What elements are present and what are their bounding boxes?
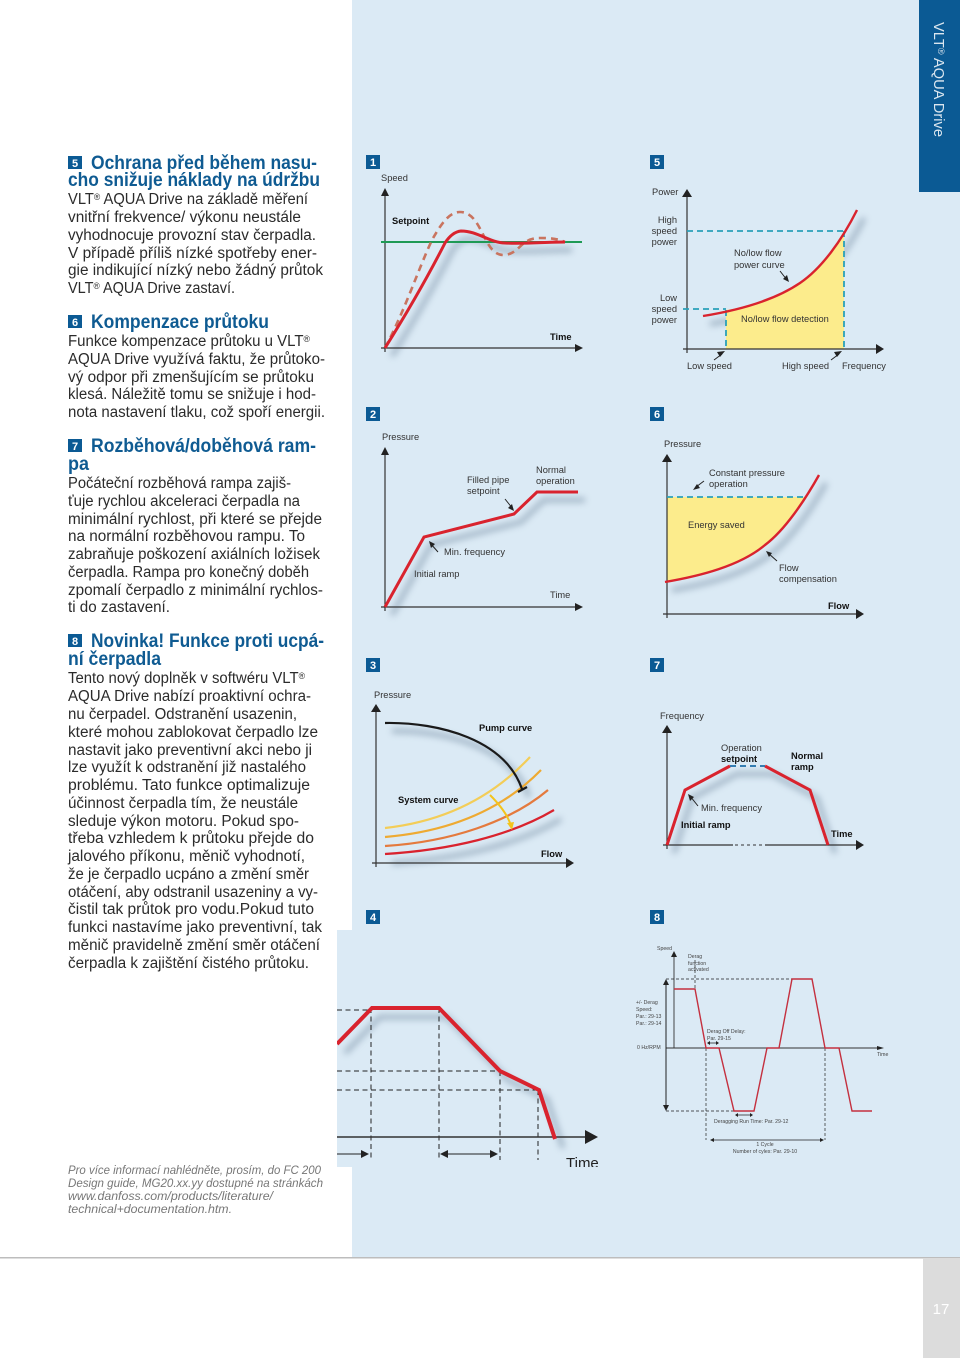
chart 6: pressure over flow: Flow <box>828 601 850 611</box>
chart 8: deragging cycle: 0 Hz/RPM <box>637 1045 661 1051</box>
chart 3: pump and system curves: 3 <box>370 660 376 672</box>
chart 7: frequency ramp: 7 <box>654 660 660 672</box>
chart 2: pressure with ramp: Initial ramp <box>414 569 459 579</box>
chart 7: frequency ramp: Operation <box>721 743 762 753</box>
chart 7: frequency ramp: Frequency <box>660 711 704 721</box>
chart 2: pressure with ramp: Pressure <box>382 432 419 442</box>
text section 8: new deragging function: nastavit jako preventivní akci nebo ji <box>68 742 312 759</box>
chart 5: power over frequency: No/low flow detection <box>741 314 829 324</box>
chart 6: pressure over flow: Flow <box>779 563 799 573</box>
footer rule <box>0 1257 960 1258</box>
text section 8: new deragging function: problému. Tato funkce optimalizuje <box>68 777 310 794</box>
text section 5: protection against dry running: VLT <box>68 280 95 297</box>
text section 8: new deragging function: ní čerpadla <box>68 649 161 670</box>
text section 8: new deragging function: čistil tak průtok pro vodu.Pokud tuto <box>68 901 314 918</box>
chart 8: deragging cycle: 1 Cycle <box>756 1142 774 1148</box>
page number <box>923 1258 960 1358</box>
chart 5: power over frequency <box>650 155 886 371</box>
footnote: more information: Pro více informací nahlédněte, prosím, do FC 200 <box>68 1163 321 1177</box>
text section 7: initial and final ramp: minimální rychlost, při které se přejde <box>68 511 322 528</box>
chart 5: power over frequency: High <box>658 215 677 225</box>
chart 8: deragging cycle: Par.: 29-14 <box>636 1021 661 1027</box>
text section 6: flow compensation: vý odpor při zmenšujícím se průtoku <box>68 369 314 386</box>
footnote: more information: Design guide, MG20.xx.yy dostupné na stránkách <box>68 1176 323 1190</box>
text section 8: new deragging function <box>67 631 324 972</box>
text section 5: protection against dry running: ® <box>94 281 100 291</box>
text section 8: new deragging function: měnič pravidelně změní směr otáčení <box>68 937 321 954</box>
chart 1: speed over time: Setpoint <box>392 216 429 226</box>
chart 8: deragging cycle: Time <box>877 1052 888 1058</box>
footnote: more information: www.danfoss.com/products/literature/ <box>68 1189 275 1203</box>
text section 5: protection against dry running: cho snižuje náklady na údržbu <box>68 170 320 191</box>
text section 7: initial and final ramp: 7 <box>72 441 78 453</box>
text section 7: initial and final ramp: Počáteční rozběhová rampa zajiš- <box>68 475 291 492</box>
chart 8: deragging cycle: Number of cyles: Par. 29-10 <box>733 1149 797 1155</box>
chart 7: frequency ramp: ramp <box>791 762 814 772</box>
text section 8: new deragging function: ® <box>299 671 305 681</box>
header tab: product name <box>919 0 960 192</box>
chart 8: deragging cycle: Par. 29-15 <box>707 1036 731 1042</box>
chart 5: power over frequency: Power <box>652 187 678 197</box>
text section 5: protection against dry running: 5 <box>72 158 78 170</box>
header tab: product name: AQUA Drive <box>930 55 946 137</box>
chart 7: frequency ramp: Min. frequency <box>701 803 762 813</box>
chart 8: deragging cycle: Derag <box>688 954 702 960</box>
text section 8: new deragging function: že je čerpadlo ucpáno a změní směr <box>68 866 309 883</box>
text section 7: initial and final ramp: na normální rozběhovou rampu. To <box>68 528 305 545</box>
text section 6: flow compensation: nota nastavení tlaku, což spoří energii. <box>68 404 325 421</box>
footnote: more information: technical+documentation.htm. <box>68 1202 232 1216</box>
text section 8: new deragging function: třeba vzhledem k průtoku přejde do <box>68 830 314 847</box>
chart 2: pressure with ramp: setpoint <box>467 486 500 496</box>
text section 6: flow compensation: AQUA Drive využívá faktu, že průtoko- <box>68 351 325 368</box>
text section 7: initial and final ramp: pa <box>68 454 89 475</box>
chart 2: pressure with ramp: 2 <box>370 409 376 421</box>
chart 5: power over frequency: Low <box>660 293 677 303</box>
chart 8: deragging cycle: activated <box>688 967 709 973</box>
chart 3: pump and system curves: Flow <box>541 849 563 859</box>
text section 8: new deragging function: funkci nastavíme jako preventivní, tak <box>68 919 322 936</box>
chart 7: frequency ramp: Normal <box>791 751 823 761</box>
text section 5: protection against dry running: ® <box>94 192 101 202</box>
chart 7: frequency ramp: Time <box>831 829 853 839</box>
text section 7: initial and final ramp: ti do zastavení. <box>68 599 170 616</box>
text section 6: flow compensation: Funkce kompenzace průtoku u VLT <box>68 333 310 350</box>
text section 8: new deragging function: jalového příkonu, měnič vyhodnotí, <box>67 848 305 865</box>
chart 6: pressure over flow: Energy saved <box>688 520 745 530</box>
chart 2: pressure with ramp: Min. frequency <box>444 547 505 557</box>
chart 6: pressure over flow: Constant pressure <box>709 468 785 478</box>
chart 1: speed over time: 1 <box>370 157 376 169</box>
badge: chart 4 number <box>366 910 380 924</box>
chart 6: pressure over flow <box>650 407 864 619</box>
text section 5: protection against dry running <box>68 153 323 297</box>
text section 5: protection against dry running: vyhodnocuje provozní stav čerpadla. <box>68 227 316 244</box>
text section 7: initial and final ramp: ťuje rychlou akceleraci čerpadla na <box>68 493 300 510</box>
text section 6: flow compensation: klesá. Náležitě tomu se snižuje i hod- <box>68 386 316 403</box>
chart 6: pressure over flow: Pressure <box>664 439 701 449</box>
badge: chart 4 number: 4 <box>370 912 377 924</box>
chart 8: deragging cycle: Derag Off Delay: <box>707 1029 746 1035</box>
chart 2: pressure with ramp: Normal <box>536 465 566 475</box>
text section 5: protection against dry running: Ochrana před během nasu- <box>91 153 317 174</box>
text section 7: initial and final ramp <box>68 436 323 616</box>
chart 2: pressure with ramp <box>366 407 585 615</box>
chart 7: frequency ramp: setpoint <box>721 754 757 764</box>
text section 5: protection against dry running: AQUA Drive na základě měření <box>100 191 309 208</box>
chart 5: power over frequency: High speed <box>782 361 829 371</box>
text section 8: new deragging function: účinnost čerpadla tím, že neustále <box>68 795 298 812</box>
chart 3: pump and system curves: System curve <box>398 795 458 805</box>
text section 8: new deragging function: Novinka! Funkce proti ucpá- <box>91 631 324 652</box>
chart 2: pressure with ramp: Time <box>550 590 570 600</box>
chart 5: power over frequency: Low speed <box>687 361 732 371</box>
chart 8: deragging cycle: 8 <box>654 912 660 924</box>
text section 8: new deragging function: sleduje výkon motoru. Pokud spo- <box>68 813 299 830</box>
chart 3: pump and system curves <box>366 658 574 868</box>
text section 7: initial and final ramp: Rozběhová/doběhová ram- <box>91 436 316 457</box>
chart 7: frequency ramp <box>650 658 864 853</box>
chart 6: pressure over flow: compensation <box>779 574 837 584</box>
chart 5: power over frequency: power <box>652 237 677 247</box>
text section 6: flow compensation <box>68 312 325 421</box>
text section 6: flow compensation: 6 <box>72 317 78 329</box>
text section 8: new deragging function: 8 <box>72 636 78 648</box>
chart 5: power over frequency: speed <box>652 304 677 314</box>
text section 8: new deragging function: Tento nový doplněk v softwéru VLT <box>68 670 306 687</box>
chart 8: deragging cycle: function <box>688 961 706 967</box>
chart 8: deragging cycle <box>636 910 888 1155</box>
chart 3: pump and system curves: Pressure <box>374 690 411 700</box>
text section 8: new deragging function: čerpadla k zajištění čistého průtoku. <box>68 955 309 972</box>
text section 7: initial and final ramp: zabraňuje poškození axiálních ložisek <box>68 546 320 563</box>
chart 5: power over frequency: power <box>652 315 677 325</box>
chart 4: ramp profile, cropped <box>337 1008 599 1172</box>
text section 6: flow compensation: Kompenzace průtoku <box>91 312 269 333</box>
text section 5: protection against dry running: gie indikující nízký nebo žádný průtok <box>68 262 323 279</box>
text section 8: new deragging function: nu čerpadel. Odstranění usazenin, <box>68 706 297 723</box>
chart 6: pressure over flow: operation <box>709 479 748 489</box>
text section 7: initial and final ramp: zpomalí čerpadlo z minimální rychlos- <box>68 582 323 599</box>
text section 8: new deragging function: otáčení, aby odstranil usazeniny a vy- <box>68 884 318 901</box>
footnote: more information <box>68 1163 323 1216</box>
chart 5: power over frequency: power curve <box>734 260 785 270</box>
text section 8: new deragging function: které mohou zablokovat čerpadlo lze <box>68 724 318 741</box>
header tab: product name: VLT <box>930 22 946 48</box>
chart 1: speed over time <box>366 155 583 356</box>
chart 2: pressure with ramp: Filled pipe <box>467 475 509 485</box>
text section 5: protection against dry running: vnitřní frekvence/ výkonu neustále <box>68 209 301 226</box>
text section 8: new deragging function: lze využít k odstranění již nastalého <box>68 759 306 776</box>
chart 5: power over frequency: No/low flow <box>734 248 782 258</box>
text section 5: protection against dry running: VLT <box>68 191 95 208</box>
header tab: product name: ® <box>936 48 946 55</box>
text section 7: initial and final ramp: čerpadla. Rampa pro konečný doběh <box>68 564 309 581</box>
chart 5: power over frequency: Frequency <box>842 361 886 371</box>
text section 5: protection against dry running: V případě příliš nízké spotřeby ener- <box>68 245 317 262</box>
chart 3: pump and system curves: Pump curve <box>479 723 532 733</box>
chart 8: deragging cycle: Par.: 29-13 <box>636 1014 661 1020</box>
page number: 17 <box>933 1301 949 1318</box>
chart 5: power over frequency: 5 <box>654 157 660 169</box>
chart 2: pressure with ramp: operation <box>536 476 575 486</box>
chart 4: ramp profile, cropped: Time <box>566 1155 599 1172</box>
chart 8: deragging cycle: Speed <box>657 946 672 952</box>
chart 6: pressure over flow: 6 <box>654 409 660 421</box>
text section 5: protection against dry running: AQUA Drive zastaví. <box>100 280 235 297</box>
chart 7: frequency ramp: Initial ramp <box>681 820 731 830</box>
chart 8: deragging cycle: Speed: <box>636 1007 652 1013</box>
chart 8: deragging cycle: Deragging Run Time: Par. 29-12 <box>714 1119 789 1125</box>
text section 6: flow compensation: ® <box>304 334 310 344</box>
chart 5: power over frequency: speed <box>652 226 677 236</box>
text section 8: new deragging function: AQUA Drive nabízí proaktivní ochra- <box>68 688 311 705</box>
panel: light blue background <box>337 0 960 1258</box>
chart 1: speed over time: Time <box>550 332 572 342</box>
chart 8: deragging cycle: +/- Derag <box>636 1000 658 1006</box>
chart 1: speed over time: Speed <box>381 173 408 183</box>
